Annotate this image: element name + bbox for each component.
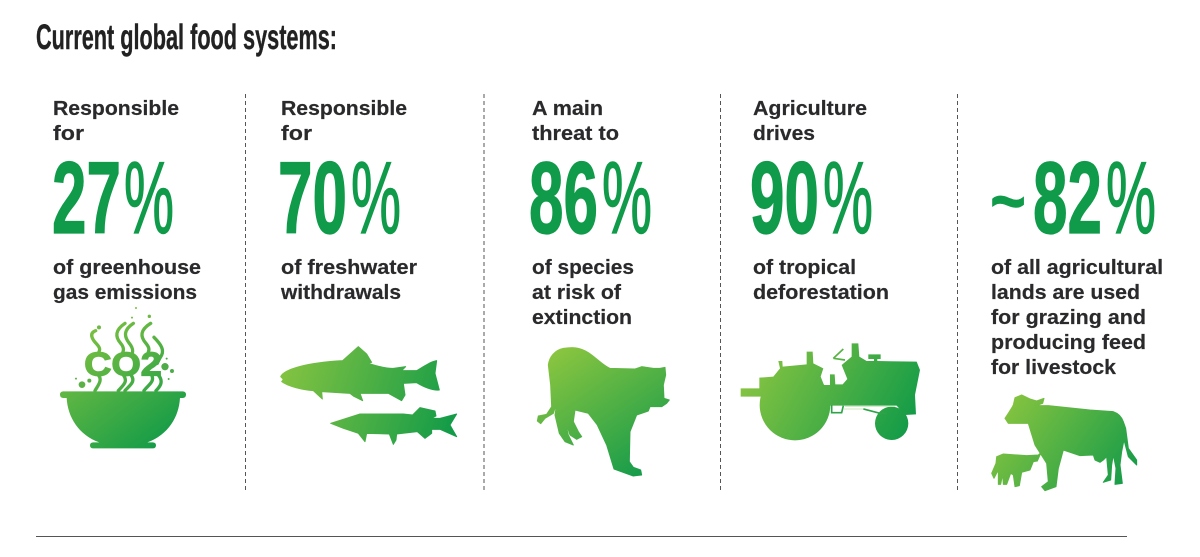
icon: cow and calf xyxy=(992,395,1137,491)
description: of greenhouse xyxy=(53,256,201,279)
description xyxy=(753,256,889,304)
description: withdrawals xyxy=(280,281,401,304)
icon: bowl with CO2 steam xyxy=(60,307,186,448)
description xyxy=(280,256,417,304)
lead text xyxy=(532,97,619,145)
title: Current global food systems: xyxy=(36,18,337,57)
panel: tropical deforestation xyxy=(741,97,920,440)
description: of freshwater xyxy=(281,256,417,279)
statistic: ~82%: % xyxy=(1106,141,1156,255)
panel: greenhouse gas emissions xyxy=(52,97,201,448)
description: at risk of xyxy=(532,281,621,304)
panel: agricultural lands xyxy=(990,141,1163,491)
lead text: drives xyxy=(753,122,815,145)
statistic: ~82%: ~ xyxy=(990,159,1026,242)
lead text xyxy=(53,97,179,145)
statistic: 86%: 86 xyxy=(529,141,598,255)
lead text: threat to xyxy=(532,122,619,145)
icon: tractor xyxy=(741,343,920,440)
description: extinction xyxy=(532,306,632,329)
description: of all agricultural xyxy=(991,256,1163,279)
description: deforestation xyxy=(753,281,889,304)
description: for grazing and xyxy=(991,306,1146,329)
description: of species xyxy=(532,256,634,279)
description: producing feed xyxy=(991,331,1146,354)
lead text: Agriculture xyxy=(753,97,867,120)
statistic: 27%: % xyxy=(124,141,174,255)
statistic: 86%: % xyxy=(602,141,652,255)
description: for livestock xyxy=(991,356,1117,379)
icon: bowl with CO2 steam: CO2 xyxy=(84,346,162,383)
description xyxy=(53,256,201,304)
description xyxy=(991,256,1163,379)
lead text: Responsible xyxy=(281,97,407,120)
lead text: A main xyxy=(532,97,603,120)
statistic: 90%: 90 xyxy=(750,141,819,255)
lead text xyxy=(281,97,407,145)
statistic: ~82%: 82 xyxy=(1033,141,1102,255)
panel: freshwater withdrawals xyxy=(278,97,457,444)
lead text xyxy=(753,97,867,145)
statistic: 27%: 27 xyxy=(52,141,121,255)
description xyxy=(532,256,634,329)
statistic: 70%: % xyxy=(351,141,401,255)
icon: two fish xyxy=(281,347,457,444)
column dividers xyxy=(246,94,958,492)
statistic: 70%: 70 xyxy=(278,141,347,255)
statistic: ~82% xyxy=(990,141,1156,255)
lead text: for xyxy=(281,122,312,145)
lead text: Responsible xyxy=(53,97,179,120)
description: lands are used xyxy=(991,281,1140,304)
panel: species at risk xyxy=(529,97,669,476)
description: of tropical xyxy=(753,256,856,279)
description: gas emissions xyxy=(53,281,197,304)
icon: big cat xyxy=(537,348,669,476)
statistic: 90%: % xyxy=(823,141,873,255)
lead text: for xyxy=(53,122,84,145)
